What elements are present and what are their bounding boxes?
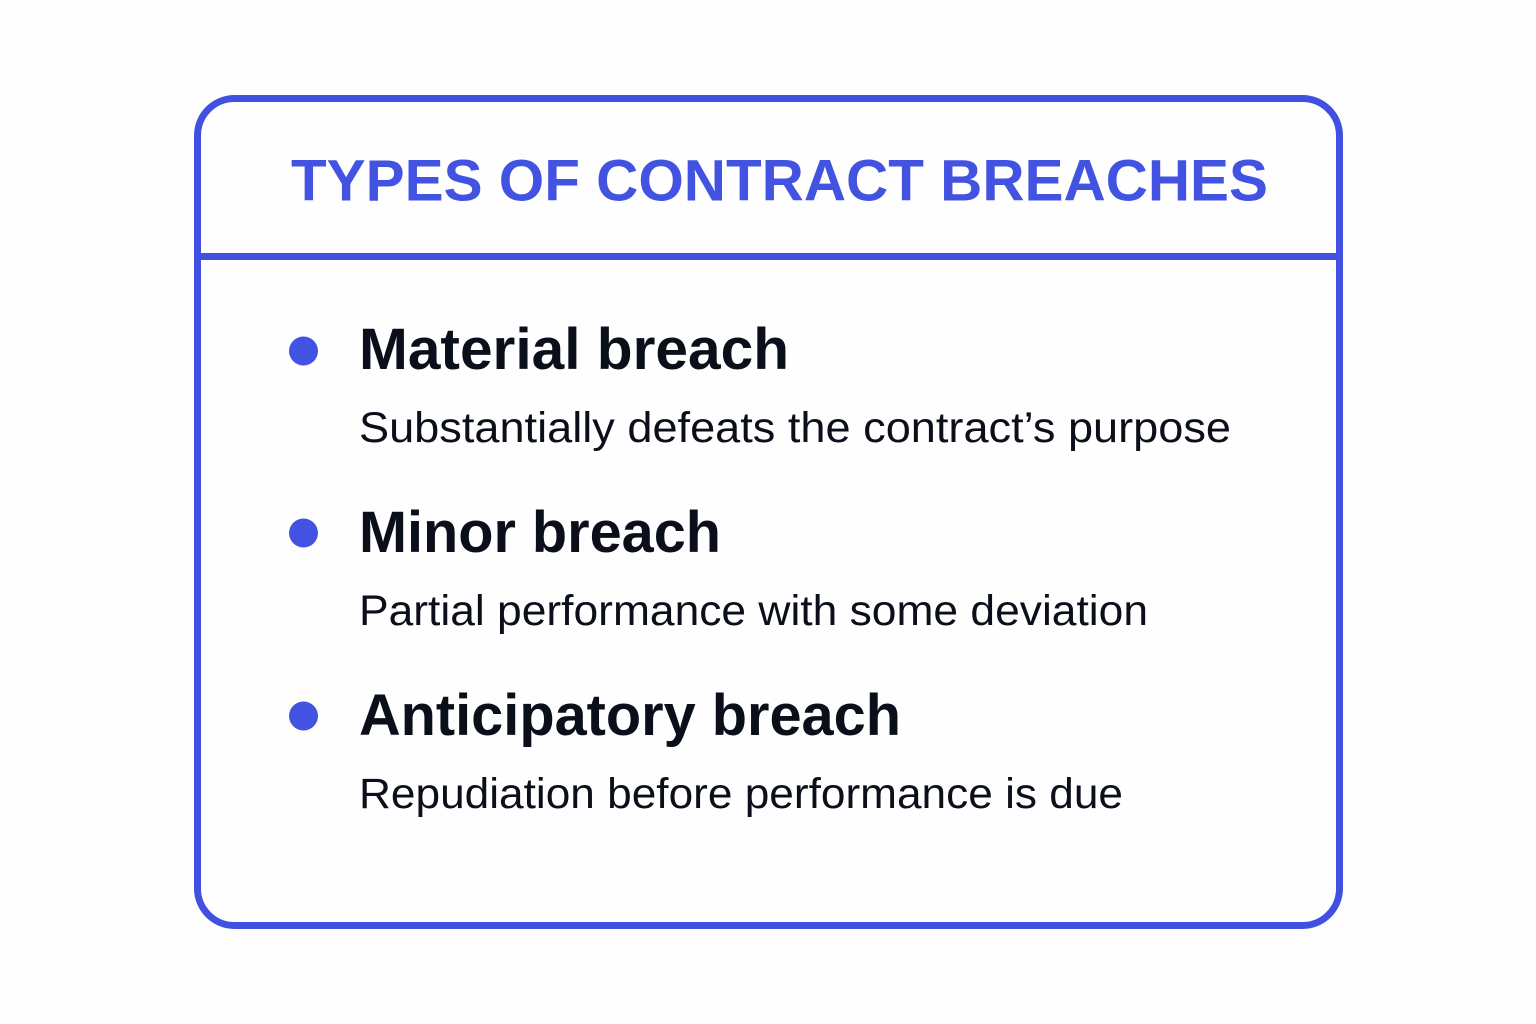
heading: minor breach: Minor breach [359, 500, 721, 565]
description: anticipatory breach: Repudiation before performance is due [359, 771, 1123, 818]
heading: material breach: Material breach [359, 317, 789, 382]
list item: anticipatory breach [289, 683, 1123, 818]
list item: minor breach [289, 500, 1148, 635]
icon: bullet [289, 336, 318, 366]
title: TYPES OF CONTRACT BREACHES [291, 148, 1268, 214]
icon: bullet [289, 702, 318, 730]
description: material breach: Substantially defeats the contract’s purpose [359, 405, 1231, 452]
description: minor breach: Partial performance with some deviation [359, 588, 1148, 635]
panel: types of contract breaches card [198, 98, 1340, 926]
list item: material breach [289, 317, 1231, 452]
heading: anticipatory breach: Anticipatory breach [359, 683, 901, 748]
icon: bullet [289, 518, 318, 548]
